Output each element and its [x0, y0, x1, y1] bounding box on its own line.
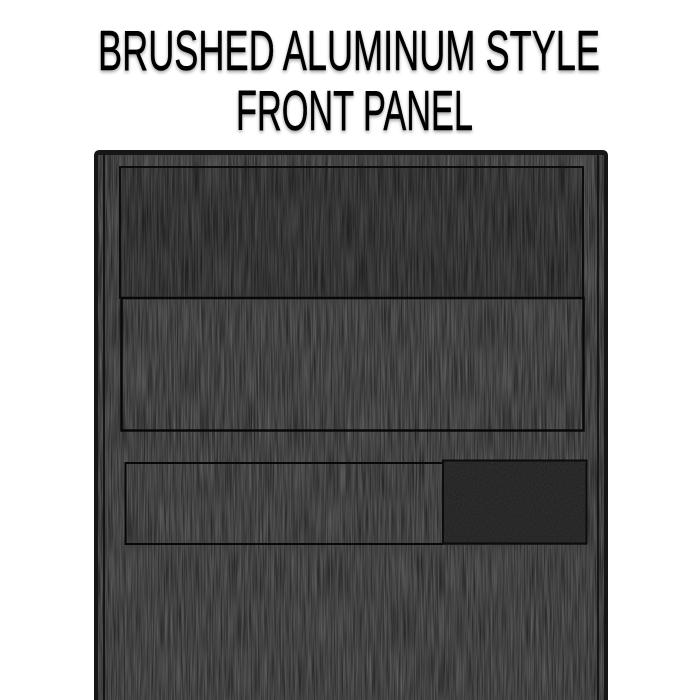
middle bay cover: [120, 298, 585, 433]
upper bay cover: [119, 166, 584, 299]
title: [98, 19, 600, 143]
panel: brushed aluminum front panel: [94, 150, 608, 700]
panel brushed surface: [98, 155, 604, 700]
title: FRONT PANEL: [236, 79, 473, 143]
matte textured block: [443, 460, 587, 545]
panel outer frame: [94, 150, 608, 700]
lower bay cover: [124, 462, 444, 546]
